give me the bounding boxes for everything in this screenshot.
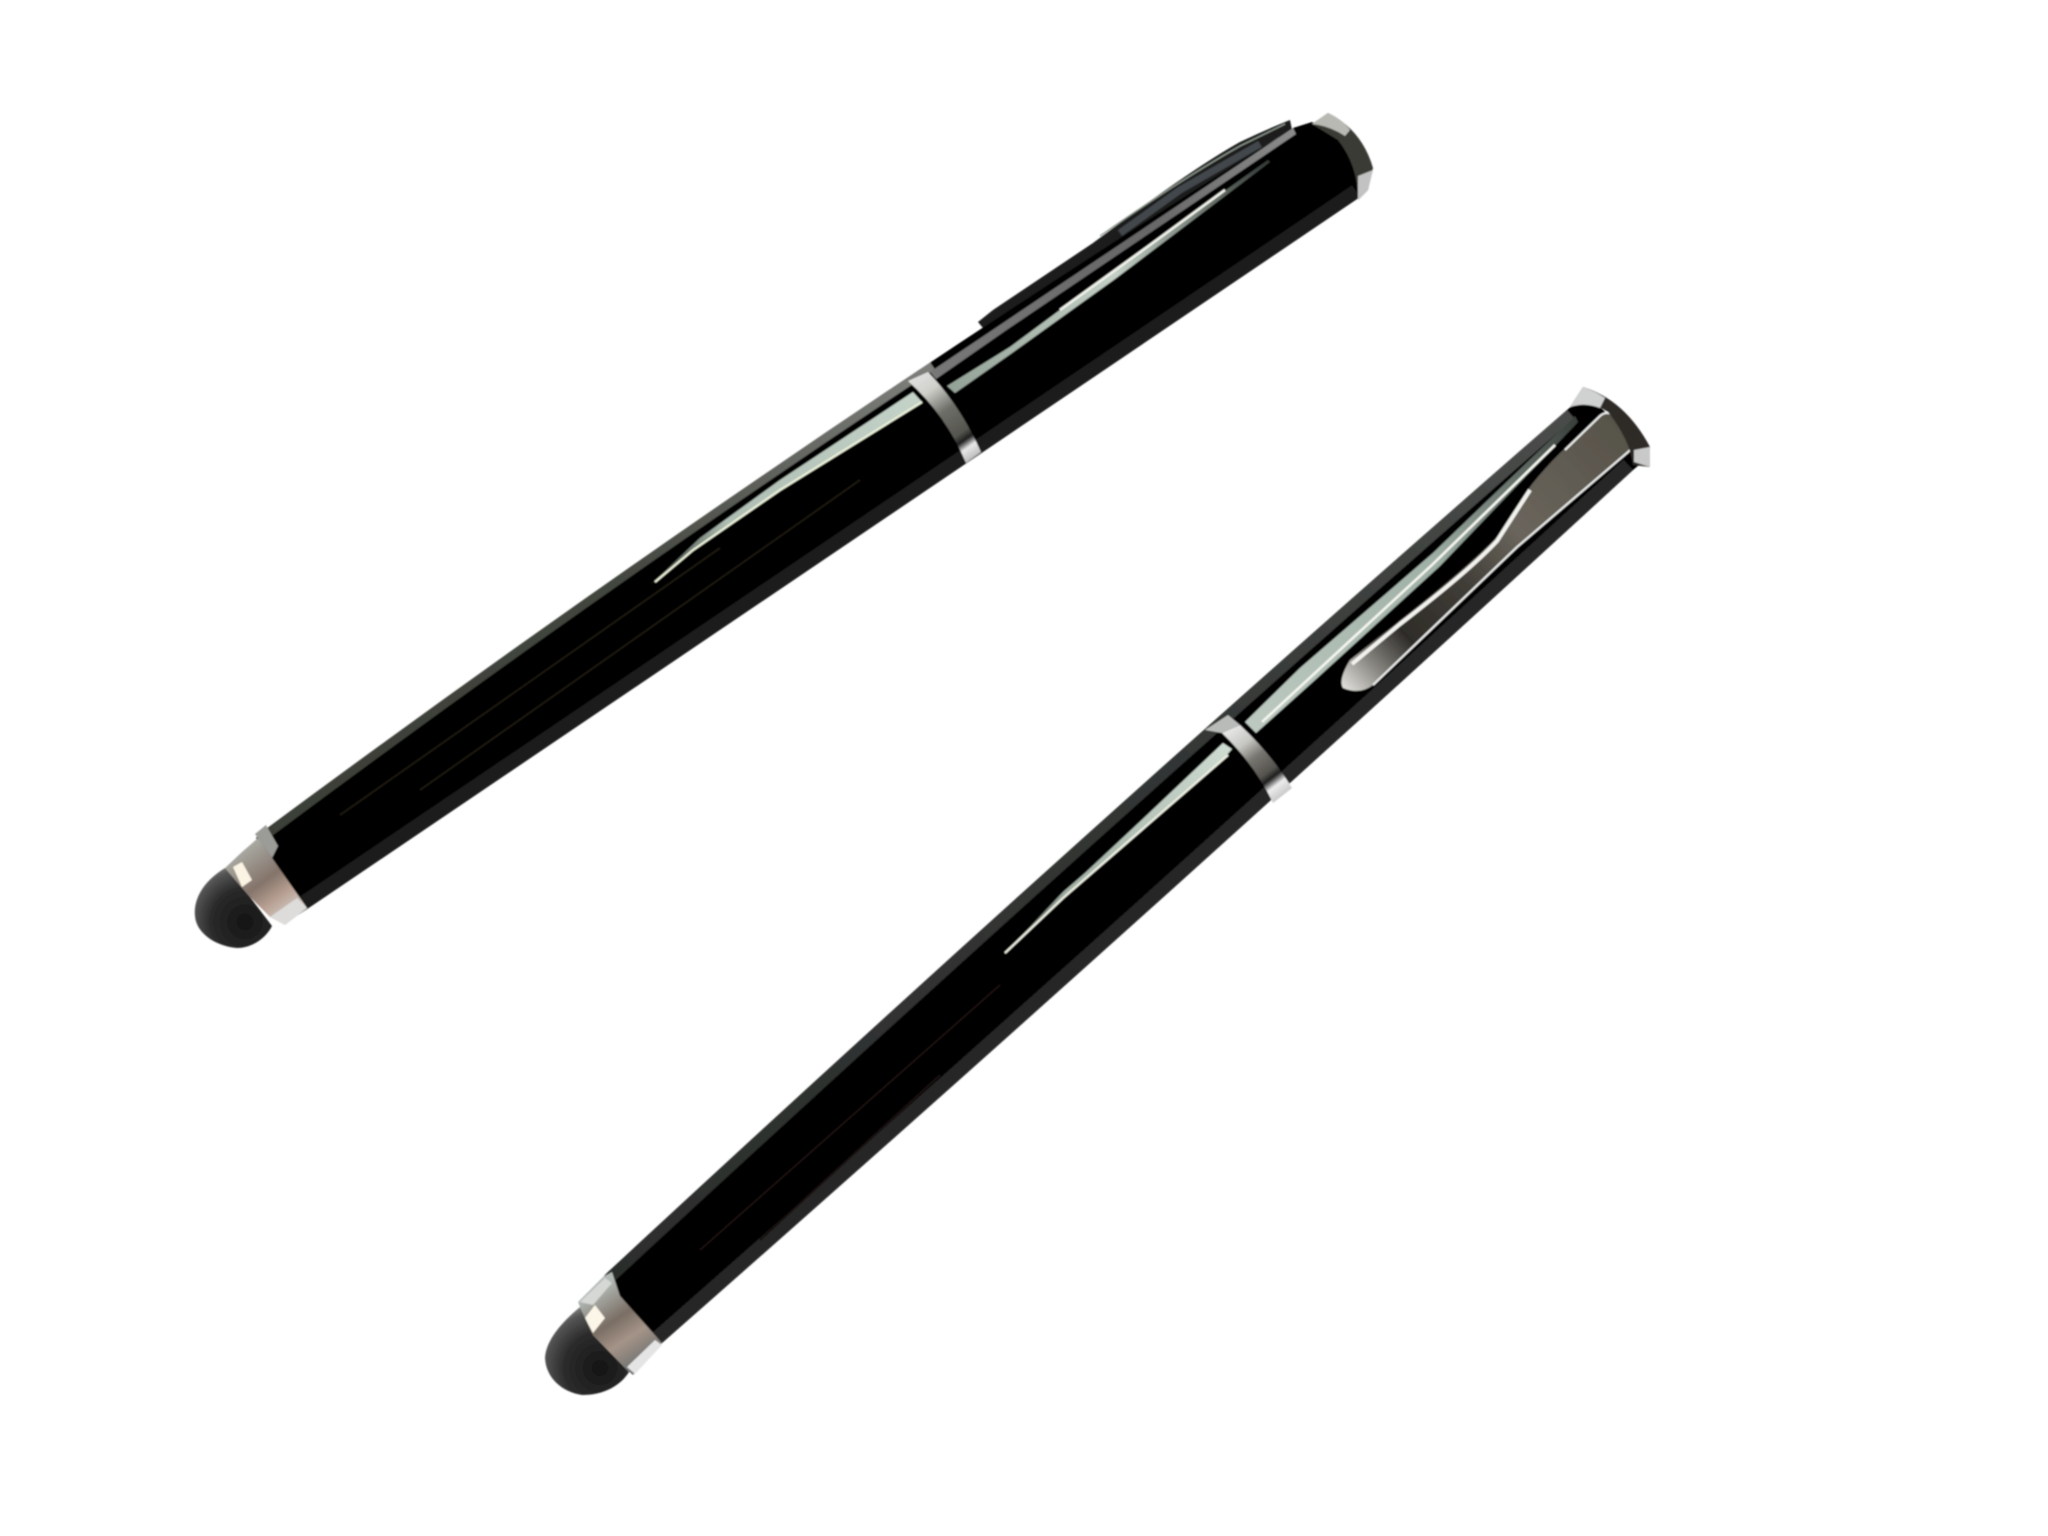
pen 1 rubber touch tip (195, 868, 272, 948)
pen 1 upper barrel bands and highlight (930, 128, 1296, 393)
pen 2 end cap (1570, 387, 1650, 467)
pen 1 clip, side view (978, 120, 1292, 328)
pen 1 barrel (256, 122, 1362, 915)
pen 2 barrel lower reflection band (650, 470, 1633, 1354)
pen 1 faint barrel streaks (340, 480, 860, 815)
pen 2 metal ferrule (578, 1272, 662, 1375)
pen 1 barrel lower reflection band (298, 197, 1360, 915)
pen 2 centre ring (1205, 715, 1292, 803)
pen 1 centre ring (908, 372, 981, 463)
pen 1 barrel reflections and streaks, clipped to barrel (262, 197, 1360, 915)
pen 2 barrel reflections and streaks, clipped to barrel (608, 410, 1633, 1354)
stylus pen: lower right, clip facing camera (545, 387, 1650, 1395)
pen 2 barrel (604, 395, 1645, 1354)
pen 2 rubber touch tip (545, 1307, 629, 1395)
pen 2 faint barrel streaks (700, 985, 1000, 1250)
pen 1 lower barrel highlight (650, 392, 922, 585)
illustration: two black stylus pens on white (194, 112, 1651, 1396)
pen 2 lower barrel highlight (1003, 743, 1232, 955)
pen 1 end cap (1312, 113, 1373, 200)
stylus pen: upper left, clip seen from the side (195, 113, 1373, 948)
pen 2 upper barrel highlight (1245, 416, 1578, 733)
pen 1 barrel upper reflection band (262, 362, 930, 832)
pen 2 barrel upper reflection band (608, 410, 1567, 1272)
pen 1 metal ferrule (225, 825, 307, 925)
pen 2 pocket clip (1342, 413, 1632, 691)
